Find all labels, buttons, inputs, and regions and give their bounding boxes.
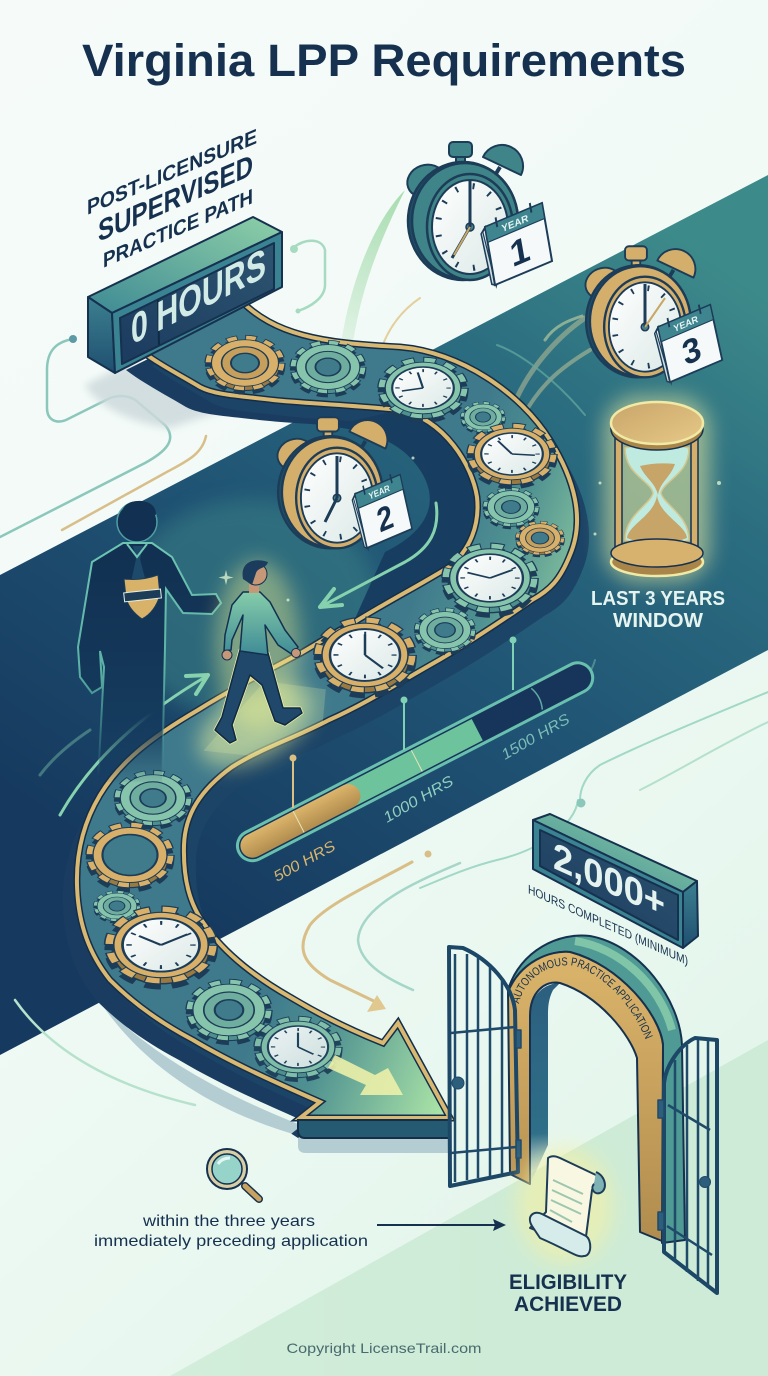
arrow to scroll xyxy=(377,1219,506,1231)
clock gear: green 16 xyxy=(258,1019,338,1079)
counter text: 2,000+ xyxy=(553,835,665,926)
right gate xyxy=(658,1038,717,1293)
calendar year 3 xyxy=(653,300,723,386)
progress gold segment xyxy=(236,780,365,862)
scroll icon xyxy=(530,1156,605,1256)
arch xyxy=(507,934,686,1244)
stopwatch year 2 xyxy=(273,417,412,551)
mentor silhouette xyxy=(78,501,221,782)
milestone ticks xyxy=(290,636,516,808)
calendar year 2: YEAR xyxy=(368,482,391,502)
calendar year 2: 2 xyxy=(374,497,397,540)
panel shadow on ground xyxy=(85,365,240,428)
caption: within the three years: within the three years xyxy=(142,1213,315,1230)
calendar year 1: 1 xyxy=(507,228,533,275)
heading: post-licensure supervised practice path: PRACTICE PATH xyxy=(103,184,253,273)
gear: green 11 xyxy=(118,773,188,827)
label: hours completed minimum: HOURS COMPLETED (MINIMUM) xyxy=(528,882,688,968)
icon: magnifying glass xyxy=(207,1149,259,1199)
gold arrow to gate xyxy=(303,850,432,1012)
calendar year 3: 3 xyxy=(679,329,705,373)
label: 500 hrs: 500 HRS xyxy=(271,838,338,885)
progress bar xyxy=(232,636,598,866)
caption: within the three years: immediately preceding application xyxy=(94,1233,368,1250)
stopwatch year 1 xyxy=(403,142,552,289)
heading: post-licensure supervised practice path xyxy=(87,124,257,273)
progress green segment xyxy=(331,719,483,813)
calendar year 1: YEAR xyxy=(501,213,530,235)
copyright: Copyright LicenseTrail.com xyxy=(286,1340,482,1356)
gear: small gold 7 xyxy=(518,523,562,555)
mentor tie xyxy=(131,546,146,582)
clock gear: gold 5 xyxy=(472,426,552,486)
directional arrows xyxy=(40,503,437,815)
mentor shirt collar xyxy=(127,544,147,557)
winding path ribbon xyxy=(63,300,589,1138)
gear: green 15 xyxy=(190,982,268,1042)
left gate xyxy=(449,947,521,1186)
calendar year 1 xyxy=(479,198,552,289)
counter panel: 0 hours xyxy=(88,217,282,373)
label: 1000 hrs: 1000 HRS xyxy=(380,773,457,826)
connector lines on background xyxy=(0,241,768,1105)
clock gear: gold 14 xyxy=(110,910,212,985)
gear: green 9 xyxy=(417,610,473,653)
stopwatch year 3 xyxy=(581,246,723,386)
clock gear: gold 10 xyxy=(319,621,411,694)
glow on path at walker xyxy=(184,666,326,784)
label: last 3 years window: WINDOW xyxy=(613,610,703,632)
walker glow xyxy=(216,560,300,730)
path marker around walker xyxy=(205,682,325,755)
path floor shadow xyxy=(100,1002,448,1153)
sparkles xyxy=(218,456,721,602)
calendar year 3: YEAR xyxy=(673,313,699,334)
arch label: AUTONOMOUS PRACTICE APPLICATION xyxy=(514,957,653,1039)
clock gear: green 8 xyxy=(447,547,533,614)
gear: small green 4 xyxy=(463,403,503,433)
heading: post-licensure supervised practice path: SUPERVISED xyxy=(98,148,253,249)
teal glow behind figures xyxy=(120,500,380,720)
mentor shield badge xyxy=(124,575,161,619)
caption: within the three years xyxy=(94,1213,368,1250)
gear: green 2 xyxy=(294,343,362,395)
label: 1500 hrs: 1500 HRS xyxy=(498,711,573,763)
label: last 3 years window xyxy=(591,588,725,632)
gear: small green 13 xyxy=(96,892,138,922)
inner arrow on path end xyxy=(328,1055,403,1095)
gear: gold open 12 xyxy=(90,826,170,889)
clock gear: green 3 xyxy=(383,360,463,420)
title: Virginia LPP Requirements xyxy=(82,35,686,86)
scroll glow xyxy=(517,1147,613,1263)
walker figure xyxy=(215,560,302,743)
counter text: 0 HOURS xyxy=(131,240,266,354)
hourglass xyxy=(604,396,710,582)
arrow base side xyxy=(298,1120,450,1138)
bottom right green floor xyxy=(170,1040,768,1376)
diagonal band background xyxy=(0,175,768,1055)
swooshes from clocks xyxy=(340,190,590,418)
label: eligibility achieved: ELIGIBILITY xyxy=(509,1271,627,1294)
heading: post-licensure supervised practice path: POST-LICENSURE xyxy=(87,124,257,220)
counter panel: 2,000+ hours xyxy=(533,814,698,948)
label: eligibility achieved xyxy=(509,1271,627,1316)
label: eligibility achieved: ACHIEVED xyxy=(514,1293,622,1316)
gear: small green 6 xyxy=(486,490,536,527)
counter digit divider xyxy=(158,300,159,345)
label: last 3 years window: LAST 3 YEARS xyxy=(591,588,725,610)
gear: gold 1 xyxy=(209,338,281,392)
calendar year 2 xyxy=(350,470,412,551)
